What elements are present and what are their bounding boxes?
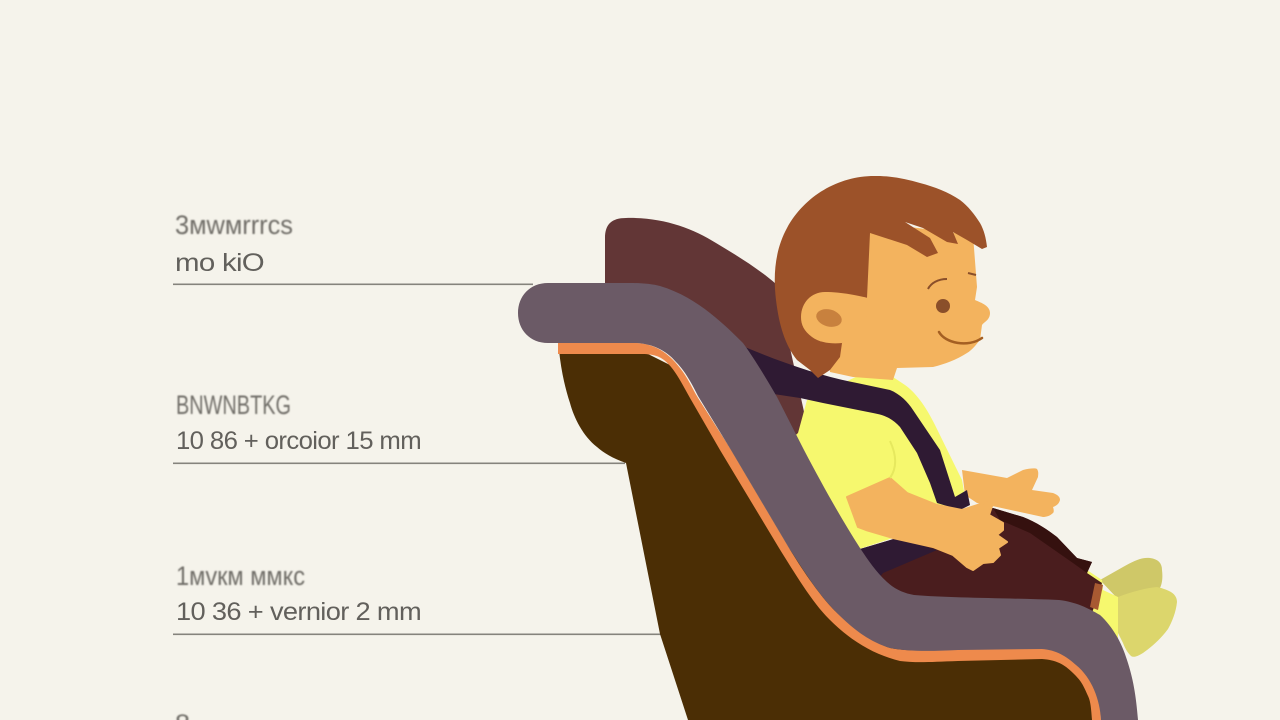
row 3 rule [173, 634, 663, 635]
seat orange piping [558, 343, 1101, 720]
sleeve fold [890, 441, 895, 478]
row 2 heading: BNWNBTKG [176, 390, 291, 420]
measurement row 2 [173, 390, 625, 464]
face and neck [826, 222, 990, 380]
row 1 value: mo kiO [175, 249, 264, 277]
trouser cuff [1090, 583, 1103, 610]
trousers [850, 508, 1102, 625]
trouser top shadow [993, 508, 1092, 573]
row 2 value: 10 86 + orcoior 15 mm [176, 427, 421, 455]
lap belt [850, 538, 937, 590]
seat grey cushion [518, 283, 1138, 720]
row 1 rule [173, 284, 533, 285]
row 2 rule [173, 462, 625, 464]
socks [1087, 570, 1118, 640]
inner ear [814, 306, 844, 330]
row 1 heading: 3мwмrrrcs [175, 210, 293, 240]
seat headrest back [605, 218, 808, 470]
measurement row 3 [173, 561, 663, 635]
shoulder harness [740, 345, 970, 510]
far eyebrow [968, 273, 976, 275]
ear [801, 292, 868, 343]
far shoe [1100, 558, 1162, 598]
smile [939, 332, 982, 343]
shirt [790, 375, 965, 552]
seat shell [559, 350, 1098, 720]
hair [775, 176, 987, 378]
far arm [962, 468, 1060, 517]
near arm and hand [847, 478, 1007, 570]
eyebrow [928, 279, 947, 289]
row 3 value: 10 36 + vernior 2 mm [176, 598, 421, 626]
seat base [558, 218, 1101, 720]
child [740, 176, 1177, 657]
near shoe [1118, 587, 1177, 657]
measurement row 1 [173, 210, 533, 285]
row 3 heading: 1мvкм ммкс [176, 561, 305, 591]
eye [936, 299, 950, 313]
